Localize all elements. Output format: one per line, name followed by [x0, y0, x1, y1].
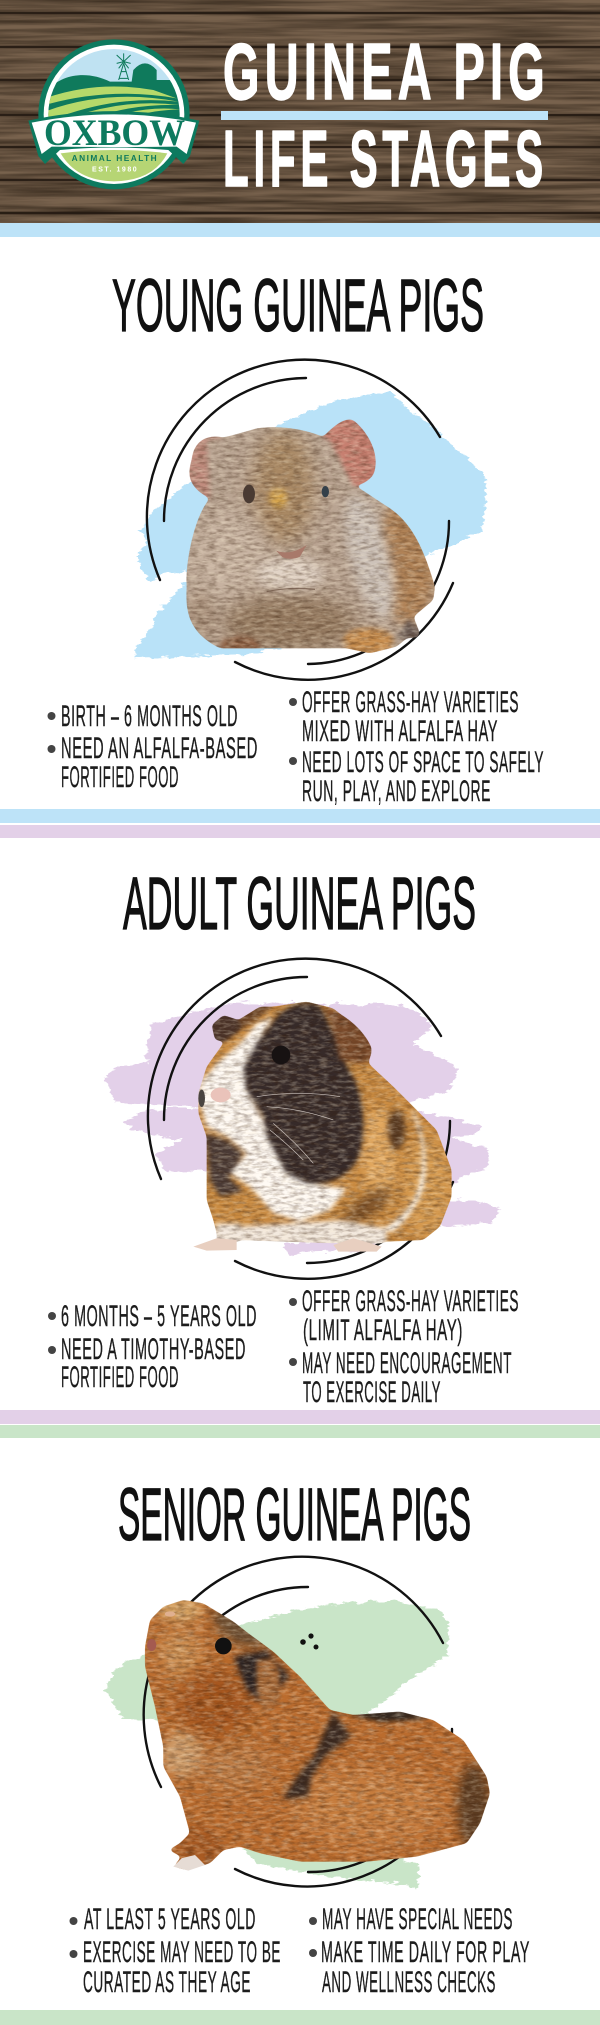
ring [147, 360, 453, 680]
belly white [240, 1220, 387, 1243]
photo: adult guinea pig [193, 997, 460, 1252]
title divider [221, 111, 548, 120]
mouth [147, 1639, 156, 1651]
list: left column: CURATED AS THEY AGE [83, 1966, 251, 1999]
list: left column: NEED A TIMOTHY-BASED [61, 1333, 246, 1366]
left ear [189, 436, 231, 499]
shoulder stripe [282, 1712, 352, 1800]
photo: young guinea pig [180, 413, 440, 660]
panel: senior guinea pigs: EXERCISE MAY NEED TO BE [83, 1936, 281, 1969]
photo: senior guinea pig [140, 1597, 493, 1873]
hind foot [397, 618, 419, 638]
logo banner [28, 111, 199, 164]
list: left column [70, 1903, 281, 1999]
list: left column [48, 1300, 257, 1394]
front legs [217, 1223, 387, 1245]
list: left column: FORTIFIED FOOD [61, 761, 179, 794]
green divider band [0, 1425, 600, 1438]
panel: adult guinea pigs: 6 MONTHS – 5 YEARS OLD [61, 1300, 257, 1333]
green brush strokes [104, 1601, 450, 1890]
nose [165, 1611, 175, 1617]
logo established date: EST. 1980 [92, 167, 137, 174]
mouth [267, 588, 315, 592]
logo tagline: ANIMAL HEALTH [72, 153, 157, 163]
blue brush stroke [134, 392, 487, 658]
list: left column [48, 700, 258, 794]
green bottom band [0, 2010, 600, 2025]
eye [272, 1046, 290, 1064]
panel: young guinea pigs [48, 264, 544, 808]
list: right column [309, 1903, 530, 1999]
list: left column: BIRTH – 6 MONTHS OLD [61, 700, 238, 733]
three dots [300, 1633, 318, 1650]
list: left column: FORTIFIED FOOD [61, 1361, 179, 1394]
list: right column [289, 1285, 519, 1409]
whiskers [257, 1093, 340, 1163]
body [140, 1597, 493, 1873]
wood plank background [0, 0, 600, 223]
ring [144, 1557, 454, 1887]
list: right column [289, 686, 544, 808]
chest patch [207, 1133, 243, 1197]
white stripe [380, 1112, 426, 1232]
body [186, 427, 435, 653]
blue divider band [0, 809, 600, 823]
header panel [0, 0, 600, 223]
logo wordmark: OXBOW [44, 112, 185, 153]
ear [257, 1658, 280, 1713]
windmill [117, 53, 131, 80]
list: left column: AT LEAST 5 YEARS OLD [84, 1903, 256, 1936]
panel: adult guinea pigs [48, 862, 519, 1409]
body [193, 997, 460, 1250]
right ear [322, 419, 376, 485]
toes [173, 1855, 205, 1871]
ear patch [233, 1650, 290, 1705]
purple brush strokes [103, 1003, 502, 1255]
right eye [322, 486, 329, 497]
Oxbow logo [28, 39, 199, 189]
panel: senior guinea pigs [70, 1473, 530, 1999]
eye [215, 1638, 232, 1654]
purple divider band [0, 1410, 600, 1424]
white blaze and chest [198, 1017, 347, 1222]
blue band [0, 223, 600, 237]
logo lower seal [61, 150, 167, 181]
nose [276, 545, 307, 559]
muzzle shadow [198, 1090, 205, 1107]
purple divider band [0, 825, 600, 838]
left eye [243, 485, 255, 503]
back stripe [350, 1712, 428, 1722]
front feet [193, 1238, 382, 1252]
ring [148, 959, 453, 1279]
nose [211, 1088, 231, 1102]
panel: young guinea pigs: NEED AN ALFALFA-BASED [61, 732, 258, 765]
left ear [212, 1015, 240, 1042]
right ear [323, 1008, 372, 1064]
rust tuft [238, 1007, 275, 1030]
dark face patch [243, 1004, 363, 1184]
